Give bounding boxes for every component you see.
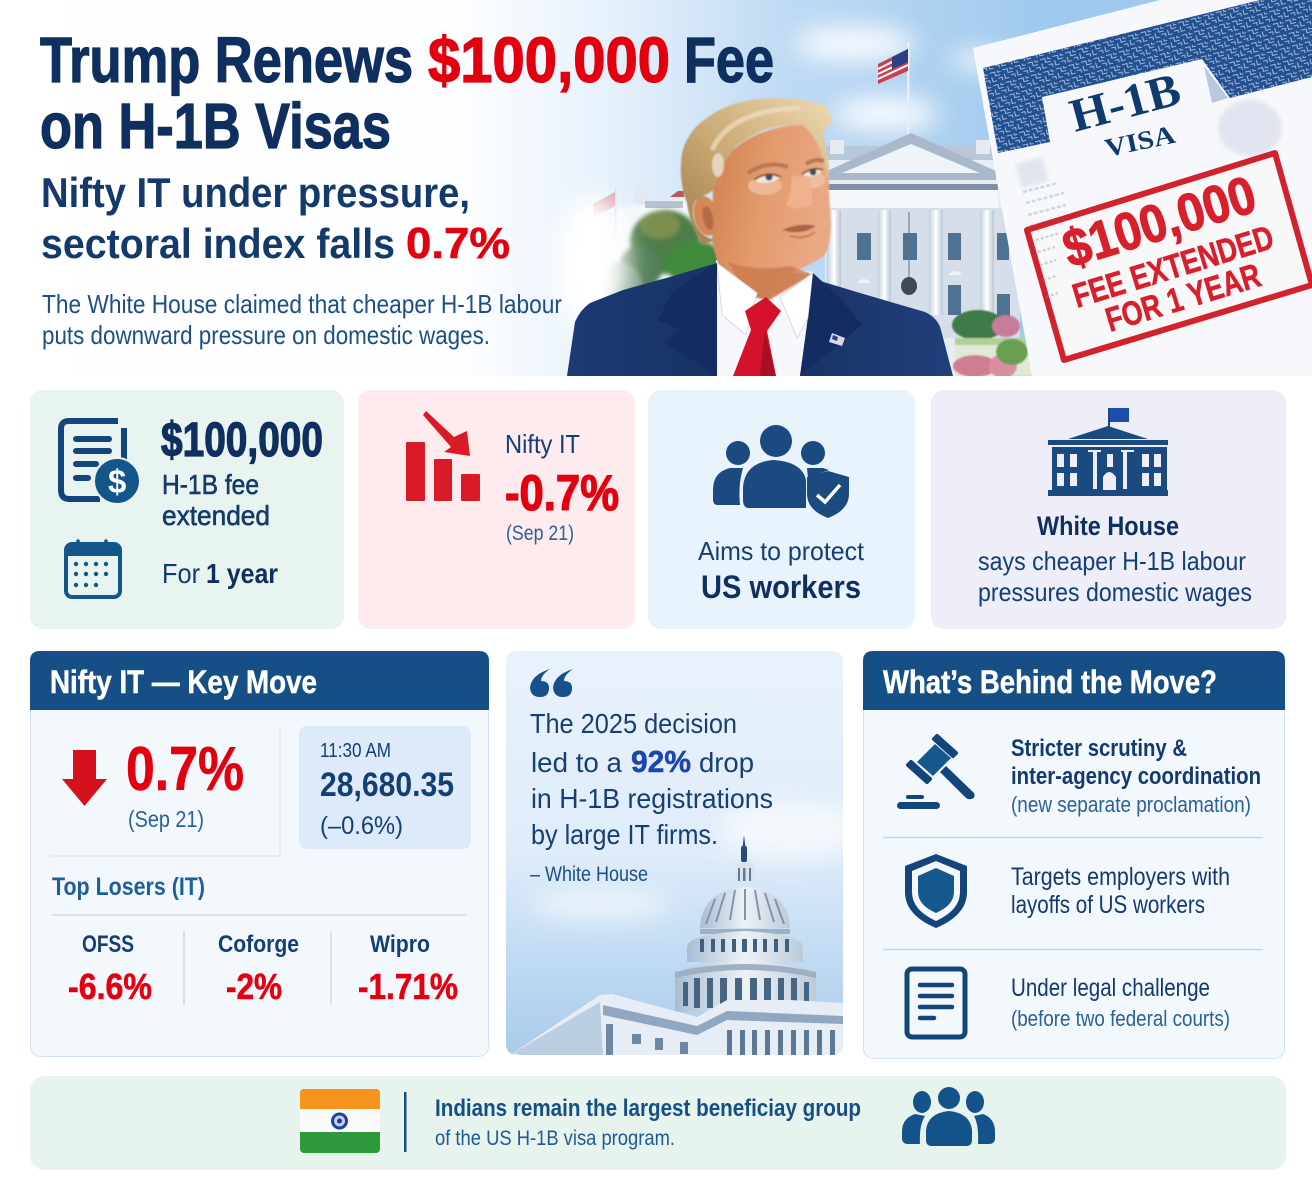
intraday box: (–0.6%) bbox=[320, 812, 403, 840]
reason 2 text: layoffs of US workers bbox=[1011, 891, 1205, 919]
red stamp: $100,000 bbox=[1056, 165, 1263, 279]
quote attribution: – White House bbox=[530, 863, 648, 886]
reason 1 text: Stricter scrutiny & bbox=[1011, 735, 1187, 762]
icon: gavel bbox=[897, 736, 975, 809]
subtitle: 0.7% bbox=[406, 219, 510, 268]
icon: India flag bbox=[300, 1089, 380, 1153]
reason 3 text: (before two federal courts) bbox=[1011, 1006, 1230, 1031]
date: (Sep 21) bbox=[506, 522, 574, 545]
icon: calendar bbox=[66, 541, 120, 597]
visa security pattern bbox=[983, 0, 1312, 153]
visa label: VISA bbox=[1102, 120, 1178, 163]
loser: OFSS: -6.6% bbox=[68, 966, 152, 1007]
loser: OFSS: OFSS bbox=[82, 931, 134, 958]
title: Trump Renews bbox=[40, 24, 413, 96]
visa title H-1B: H-1B bbox=[1064, 63, 1186, 143]
date: (Sep 21) bbox=[128, 806, 204, 832]
header banner bbox=[0, 0, 1312, 378]
loser: Wipro: Wipro bbox=[370, 931, 430, 958]
panel: what's behind the move bbox=[863, 651, 1285, 1058]
reason 3 text: Under legal challenge bbox=[1011, 974, 1210, 1002]
fee amount: $100,000 bbox=[161, 414, 323, 467]
card text: US workers bbox=[701, 569, 861, 605]
red stamp bbox=[1027, 153, 1312, 360]
quote text: 92% bbox=[631, 744, 691, 779]
quote text: The 2025 decision bbox=[530, 708, 737, 739]
reason 2 text: Targets employers with bbox=[1011, 863, 1230, 891]
panel: quote bbox=[506, 651, 860, 1056]
title: Fee bbox=[684, 24, 774, 96]
change value: 0.7% bbox=[126, 735, 244, 804]
icon: people bbox=[902, 1087, 995, 1146]
icon: document bbox=[907, 969, 965, 1037]
footer text bbox=[435, 1095, 861, 1150]
card text: says cheaper H-1B labour bbox=[978, 546, 1246, 576]
loser: Wipro bbox=[358, 931, 458, 1007]
intraday box: 28,680.35 bbox=[320, 766, 454, 804]
Nifty IT value: -0.7% bbox=[505, 465, 619, 521]
reason 3 text bbox=[1011, 974, 1230, 1031]
intro text: puts downward pressure on domestic wages. bbox=[42, 320, 490, 350]
duration text: 1 year bbox=[206, 558, 278, 589]
reason 1 text: inter-agency coordination bbox=[1011, 763, 1261, 790]
panel: US workers card bbox=[648, 390, 915, 629]
panel: Nifty IT key move bbox=[30, 651, 489, 1056]
loser: Wipro: -1.71% bbox=[358, 966, 458, 1007]
intro text bbox=[42, 289, 562, 350]
quote text: led to a bbox=[531, 747, 622, 778]
loser: Coforge bbox=[218, 931, 299, 1007]
title bbox=[40, 34, 773, 150]
panel header bbox=[863, 651, 1285, 710]
icon: falling bars bbox=[406, 411, 480, 501]
subtitle: Nifty IT under pressure, bbox=[41, 169, 470, 216]
fee label: H-1B fee bbox=[162, 469, 259, 500]
fee label bbox=[162, 469, 270, 531]
intraday box bbox=[299, 726, 471, 849]
panel header bbox=[30, 651, 489, 710]
subtitle bbox=[42, 176, 510, 259]
Nifty IT label: Nifty IT bbox=[505, 429, 580, 459]
quote text: drop bbox=[699, 747, 754, 778]
fee label: extended bbox=[162, 500, 270, 531]
quote text: in H-1B registrations bbox=[531, 783, 773, 814]
panel: Nifty IT card bbox=[358, 390, 635, 629]
portrait: Trump bbox=[567, 98, 953, 376]
title: on H-1B Visas bbox=[40, 90, 391, 162]
reason 2 text bbox=[1011, 863, 1230, 919]
duration text: For bbox=[162, 558, 200, 589]
duration text bbox=[162, 558, 278, 589]
card text: White House bbox=[1037, 511, 1179, 541]
intro text: The White House claimed that cheaper H-1B labour bbox=[42, 289, 562, 319]
card text: Aims to protect bbox=[698, 536, 865, 566]
icon: document with dollar: $ bbox=[108, 463, 126, 500]
footer text: Indians remain the largest beneficiay group bbox=[435, 1095, 861, 1122]
card text bbox=[698, 536, 865, 605]
panel: White House card bbox=[931, 390, 1286, 629]
quote text bbox=[530, 708, 773, 850]
icon: White House building bbox=[1048, 408, 1168, 496]
reason 1 text: (new separate proclamation) bbox=[1011, 792, 1251, 817]
loser: OFSS bbox=[68, 931, 152, 1007]
panel: fee card bbox=[30, 390, 344, 629]
top losers heading: Top Losers (IT) bbox=[52, 873, 205, 901]
reason 1 text bbox=[1011, 735, 1261, 817]
icon: document with dollar bbox=[61, 421, 140, 504]
card text bbox=[978, 511, 1252, 607]
quote text: by large IT firms. bbox=[531, 819, 718, 850]
loser: Coforge: Coforge bbox=[218, 931, 299, 958]
intraday box: 11:30 AM bbox=[320, 740, 391, 762]
icon: people and shield bbox=[713, 425, 849, 518]
icon: quotation mark bbox=[530, 669, 573, 697]
subtitle: sectoral index falls bbox=[41, 220, 395, 267]
red stamp: FOR 1 YEAR bbox=[1101, 257, 1265, 340]
card text: pressures domestic wages bbox=[978, 577, 1252, 607]
loser: Coforge: -2% bbox=[226, 966, 282, 1007]
background: White House bbox=[556, 42, 1045, 378]
panel header: What’s Behind the Move? bbox=[883, 664, 1217, 700]
icon: shield bbox=[905, 854, 967, 928]
capitol building bbox=[513, 835, 843, 1056]
visa document bbox=[973, 0, 1312, 376]
title: $100,000 bbox=[428, 24, 670, 96]
trees bbox=[556, 195, 725, 335]
down arrow bbox=[62, 750, 107, 806]
panel header: Nifty IT — Key Move bbox=[50, 664, 317, 700]
footer text: of the US H-1B visa program. bbox=[435, 1127, 675, 1150]
footer banner bbox=[30, 1076, 1286, 1170]
